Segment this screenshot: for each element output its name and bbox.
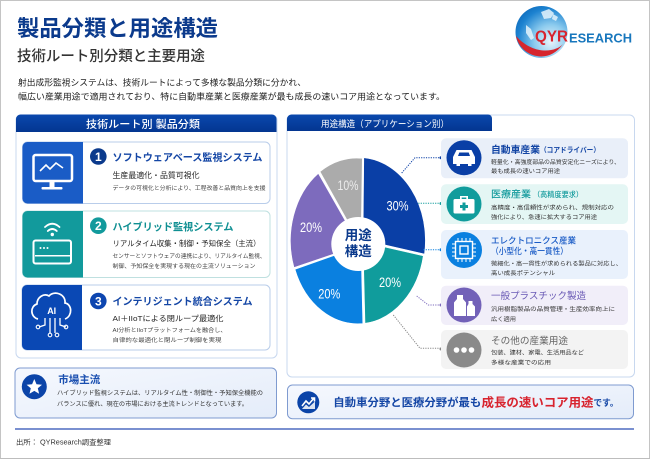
application: automotive: 軽量化・高強度部品の品質安定化ニーズにより、 [491, 158, 620, 166]
callout: market mainstream: 市場主流 [58, 373, 101, 386]
icon: chip [452, 238, 476, 262]
card 2: hybrid: ハイブリッド監視システム [112, 220, 234, 233]
intro text: 幅広い産業用途で適用されており、特に自動車産業と医療産業が最も成長の速いコア用途となっています。 [18, 90, 445, 102]
card 2: hybrid [22, 211, 270, 278]
application: general plastics: 広く適用 [491, 315, 516, 323]
application: electronics [441, 230, 628, 279]
card 1: software based: 1 [95, 150, 102, 164]
connector lines [393, 156, 442, 350]
application: electronics: （小型化・高一貫性） [491, 245, 568, 256]
logo: QYResearch: QYR [535, 28, 568, 46]
application: general plastics: 汎用樹脂製品の品質管理・生産効率向上に [491, 305, 615, 313]
pie label 30%: 30% [386, 198, 408, 214]
card 3: intelligent integration: AI分析とIIoTプラットフォームを融合し、 [112, 326, 226, 334]
title: 製品分類と用途構造 [17, 16, 218, 41]
card 2: hybrid: 2 [95, 219, 102, 233]
application: automotive: （コアドライバー） [540, 146, 600, 154]
icon: growth chart [297, 391, 319, 413]
icon: three dots [454, 347, 474, 353]
card 3: intelligent integration: 自律的な最適化と閉ループ制御を実現 [112, 336, 222, 344]
pie chart [290, 158, 425, 324]
right panel header [287, 114, 492, 131]
application: general plastics [441, 286, 628, 325]
icon: car [453, 150, 475, 166]
card 1: software based: データの可視化と分析により、工程改善と品質向上を支援 [112, 184, 266, 192]
card 1: software based [22, 142, 270, 204]
pie chart: 構造 [345, 243, 372, 259]
application: electronics: 微細化・高一貫性が求められる製品に対応し、 [491, 260, 622, 268]
application: electronics: 高い成長ポテンシャル [491, 269, 555, 277]
application: medical [441, 184, 628, 224]
pie label 10%: 10% [338, 178, 358, 193]
callout: market mainstream: ハイブリッド監視システムは、リアルタイム性・制御性・予知保全機能の [57, 389, 263, 397]
left panel header [16, 114, 276, 132]
card 2: hybrid: 制御、予知保全を実現する現在の主流ソリューション [112, 262, 256, 270]
application: automotive: 最も成長の速いコア用途 [491, 167, 560, 175]
card 1: software based: ソフトウェアベース監視システム [112, 151, 262, 164]
callout: market mainstream [15, 368, 276, 418]
left panel header: 技術ルート別 製品分類 [86, 118, 201, 130]
application: medical: （高精度要求） [533, 190, 583, 199]
card 3: intelligent integration: インテリジェント統合システム [112, 295, 252, 308]
application: automotive [441, 138, 628, 178]
logo: QYResearch [516, 6, 632, 58]
icon: bottles [454, 295, 475, 316]
icon: monitor [34, 155, 72, 190]
logo: QYResearch: ESEARCH [569, 32, 632, 46]
application: general plastics: 一般プラスチック製造 [491, 290, 586, 302]
icon: star [22, 374, 47, 399]
callout: market mainstream: バランスに優れ、現在の市場における主流トレンドとなっています。 [57, 400, 248, 408]
card 1: software based: 生産最適化・品質可視化 [112, 170, 200, 180]
card 3: intelligent integration [22, 285, 270, 350]
callout: core applications conclusion: 自動車分野と医療分野が最も [333, 396, 481, 409]
intro text [18, 76, 445, 102]
application: electronics: エレクトロニクス産業 [491, 234, 576, 246]
application: other industries: 包装、建材、家電、生活用品など [491, 348, 584, 356]
pie label purple 20%: 20% [300, 220, 322, 235]
application: automotive: 自動車産業 [491, 143, 540, 156]
intro text: 射出成形監視システムは、技術ルートによって多様な製品分類に分かれ、 [18, 76, 306, 88]
icon: AI cloud: AI [47, 306, 56, 316]
panel: technology route classification [16, 114, 277, 358]
panel: application structure [287, 114, 634, 377]
icon: AI cloud [32, 293, 71, 337]
application: medical: 高精度・高信頼性が求められ、規制対応の [491, 204, 614, 212]
application: medical: 医療産業 [491, 188, 531, 200]
callout: core applications conclusion: です。 [594, 398, 618, 408]
pie label teal 20%: 20% [379, 275, 401, 290]
card 3: intelligent integration: 3 [95, 294, 102, 308]
right panel header: 用途構造（アプリケーション別） [321, 118, 449, 129]
callout: core applications conclusion [288, 385, 634, 419]
subtitle: 技術ルート別分類と主要用途 [17, 48, 205, 65]
icon: wifi router [34, 224, 71, 264]
card 3: intelligent integration: AI＋IIoTによる閉ループ最適化 [112, 313, 224, 323]
callout: core applications conclusion: 成長の速いコア用途 [482, 394, 594, 410]
source note: 出所： QYResearch調査整理 [16, 438, 111, 446]
card 2: hybrid: センサーとソフトウェアの連携により、リアルタイム監視、 [112, 252, 266, 260]
card 2: hybrid: リアルタイム収集・制御・予知保全（主流） [112, 238, 260, 248]
application: medical: 強化により、急速に拡大するコア用途 [491, 213, 597, 221]
icon: medical kit [454, 196, 474, 214]
application: other industries: 多様な産業での応用 [491, 358, 551, 366]
application: other industries [441, 330, 628, 369]
application: other industries: その他の産業用途 [491, 334, 568, 347]
pie chart: 用途 [345, 227, 372, 243]
pie label blue 20%: 20% [318, 286, 340, 302]
